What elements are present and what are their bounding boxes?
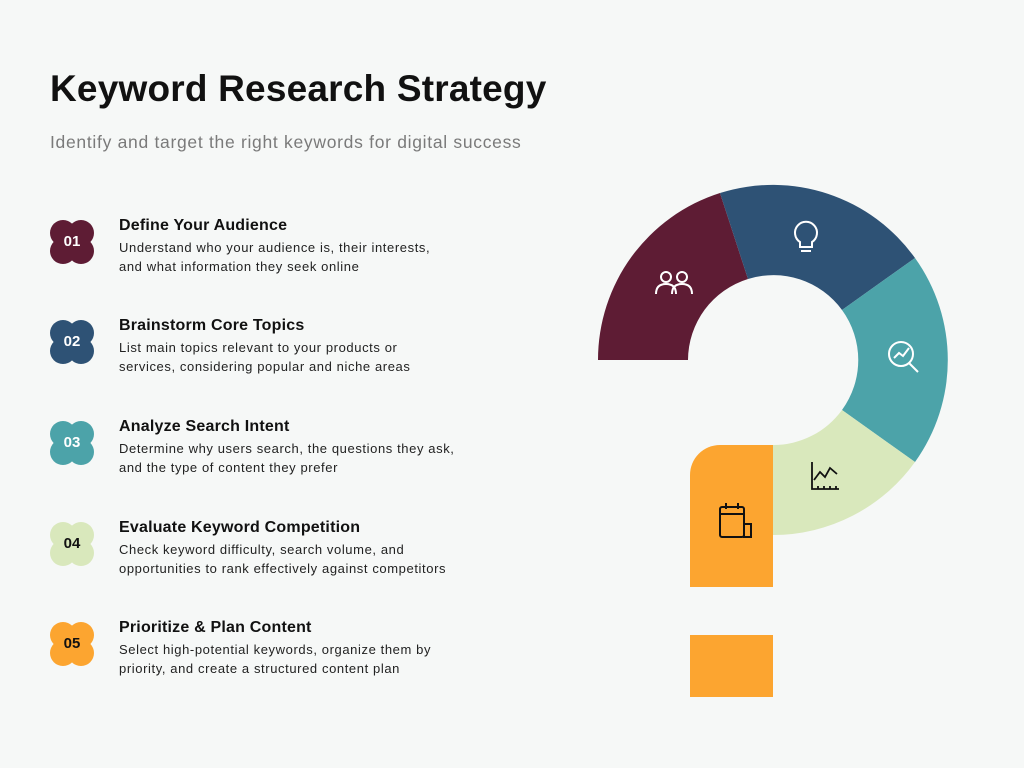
text 03: Determine why users search, the questions they ask, [119,441,455,456]
text 03: and the type of content they prefer [119,460,338,474]
text 03 [119,441,455,474]
icon: calendar [720,503,751,537]
text 02: services, considering popular and niche areas [119,358,410,374]
segment: teal [842,258,948,462]
badge 02 [50,320,94,364]
segment: lime [773,410,915,535]
text 04 [119,542,446,576]
text 05: Select high-potential keywords, organize them by [119,642,431,657]
segment: maroon [598,193,748,360]
text 05 [119,642,431,676]
badge 03 [50,421,94,465]
text 01: and what information they seek online [119,258,359,274]
badge 04: 04 [64,535,80,552]
text 04: opportunities to rank effectively against competitors [119,560,446,576]
step 03 [50,418,455,474]
badge 04 [50,522,94,566]
text 02 [119,340,410,374]
heading 03: Analyze Search Intent [119,418,289,435]
stem: orange [690,445,773,587]
icon: people [656,272,692,294]
badge 02: 02 [64,333,80,350]
icon: lightbulb [795,222,817,251]
text 01: Understand who your audience is, their interests, [119,240,430,255]
badge 05: 05 [64,635,80,652]
heading 01: Define Your Audience [119,217,287,234]
step 05 [50,619,431,676]
heading 04: Evaluate Keyword Competition [119,519,360,536]
step 02 [50,317,410,374]
step 04 [50,519,446,576]
badge 01: 01 [64,233,80,250]
title: Keyword Research Strategy [50,68,546,109]
segment: navy [720,185,915,310]
heading 02: Brainstorm Core Topics [119,317,304,334]
heading 05: Prioritize & Plan Content [119,619,312,636]
text 02: List main topics relevant to your products or [119,340,397,355]
step 01 [50,217,430,274]
icon: chart [812,462,839,489]
text 05: priority, and create a structured content plan [119,660,400,676]
badge 05 [50,622,94,666]
text 01 [119,240,430,274]
subtitle: Identify and target the right keywords for digital success [50,132,522,152]
dot: orange [690,635,773,697]
text 04: Check keyword difficulty, search volume, and [119,542,404,557]
icon: search growth [889,342,918,372]
badge 01 [50,220,94,264]
badge 03: 03 [64,434,80,451]
